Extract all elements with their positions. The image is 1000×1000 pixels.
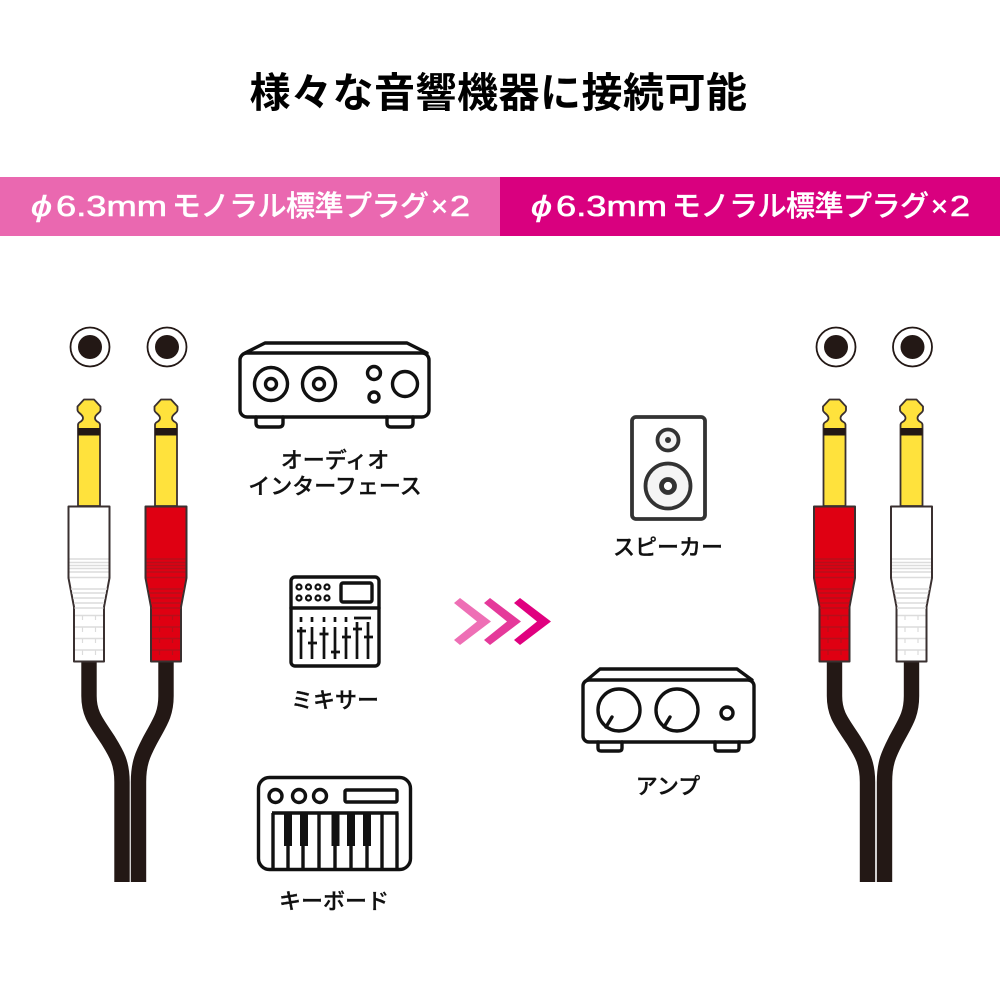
jack end view: red channel xyxy=(148,328,186,366)
label: audio interface: オーディオ xyxy=(281,448,389,473)
jack end view: white channel xyxy=(70,328,110,366)
title: 様々な音響機器に接続可能 xyxy=(250,70,748,116)
label: speaker: スピーカー xyxy=(613,535,723,560)
icon: audio interface xyxy=(240,343,429,427)
header band: left plug spec xyxy=(0,177,500,236)
jack end view: red channel xyxy=(816,328,856,366)
red plug xyxy=(814,400,855,662)
label: audio interface: インターフェース xyxy=(248,474,422,499)
icon: speaker xyxy=(632,417,705,519)
header band: left plug spec: ϕ xyxy=(31,191,52,223)
label: mixer: ミキサー xyxy=(291,688,379,713)
header band: left plug spec: × xyxy=(431,191,448,223)
white plug xyxy=(891,400,932,662)
header band: left plug spec: 6.3mm xyxy=(56,191,167,223)
black cables joining together xyxy=(89,660,166,882)
arrows: three chevrons xyxy=(454,598,551,645)
icon: mixer xyxy=(291,577,379,666)
left cable: white and red plugs xyxy=(68,328,186,882)
black cables joining together xyxy=(834,660,912,882)
header band: right plug spec: 6.3mm xyxy=(556,191,667,223)
white plug xyxy=(68,400,110,662)
icon: amplifier xyxy=(583,669,754,751)
header band: right plug spec: × xyxy=(931,191,948,223)
header band: right plug spec: ϕ xyxy=(531,191,552,223)
right cable: red and white plugs xyxy=(814,328,932,882)
header band: left plug spec: モノラル標準プラグ xyxy=(172,190,429,223)
label: amplifier: アンプ xyxy=(636,774,700,799)
icon: keyboard xyxy=(258,778,410,870)
header band: left plug spec: 2 xyxy=(450,191,470,223)
header band: right plug spec: 2 xyxy=(950,191,970,223)
red plug xyxy=(146,400,186,662)
header band: right plug spec: モノラル標準プラグ xyxy=(672,190,929,223)
header band: right plug spec xyxy=(500,177,1000,236)
label: keyboard: キーボード xyxy=(279,889,389,914)
jack end view: white channel xyxy=(893,328,932,366)
